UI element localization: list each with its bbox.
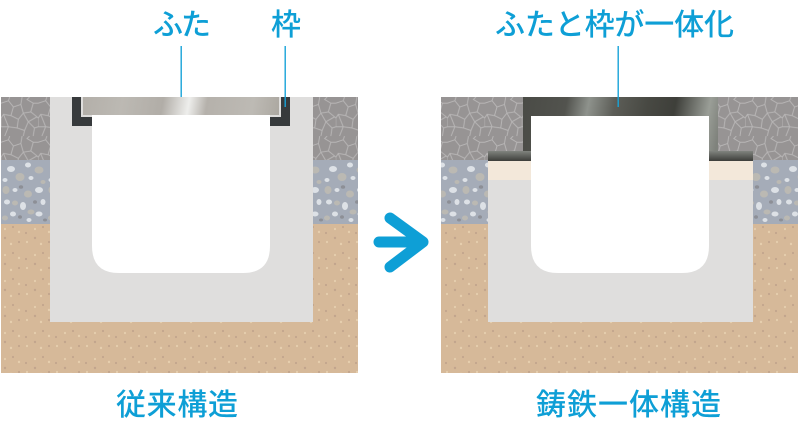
caption: 鋳鉄一体構造: 鋳鉄一体構造 <box>536 389 721 422</box>
leader line: 一体化 <box>618 46 619 107</box>
flange: left <box>488 151 531 161</box>
concrete gutter <box>488 161 753 322</box>
gravel layer <box>441 160 798 224</box>
gutter cavity <box>92 97 270 273</box>
panel: conventional structure cross-section <box>1 97 358 373</box>
lid <box>83 97 279 115</box>
concrete gutter <box>50 97 313 322</box>
soil layer <box>1 224 358 373</box>
asphalt layer <box>1 97 358 160</box>
label: ふた: ふた <box>153 9 211 42</box>
gutter cavity <box>531 116 709 273</box>
arrow <box>379 218 423 267</box>
caption: 従来構造: 従来構造 <box>116 389 238 422</box>
gravel layer <box>1 160 358 224</box>
soil layer <box>441 224 798 373</box>
integrated cast-iron lid and frame <box>523 97 718 151</box>
flange: right <box>709 151 753 161</box>
panel: integrated cast-iron structure cross-section <box>441 97 798 373</box>
cream mortar bed <box>488 161 753 180</box>
asphalt layer <box>441 97 798 160</box>
frame: right <box>270 97 290 126</box>
frame: left <box>72 97 92 126</box>
label: ふたと枠が一体化: ふたと枠が一体化 <box>495 9 734 42</box>
label: 枠: 枠 <box>271 9 301 42</box>
leader line: 枠 <box>284 46 286 107</box>
leader line: ふた <box>180 46 182 107</box>
